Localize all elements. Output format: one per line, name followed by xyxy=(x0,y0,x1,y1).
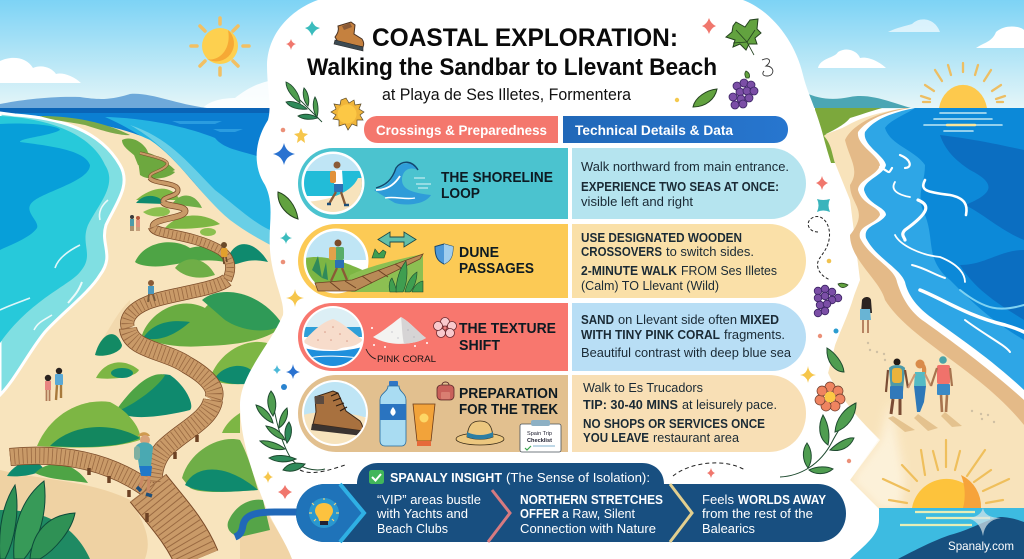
insight column 1: “VIP” areas bustle xyxy=(377,493,481,507)
dune vegetation xyxy=(7,116,283,537)
icon: shield xyxy=(435,244,453,264)
icon: grapes right xyxy=(814,283,848,317)
pink coral callout xyxy=(366,349,436,365)
row 4: preparation for the trek xyxy=(298,375,806,452)
row 4 details: Walk to Es Trucadors xyxy=(583,381,703,395)
row 4 details: NO SHOPS OR SERVICES ONCE xyxy=(583,417,765,431)
row 3 details xyxy=(572,303,806,371)
single walker xyxy=(860,297,872,333)
insight column 2: NORTHERN STRETCHES xyxy=(520,493,663,507)
right sun xyxy=(921,63,1005,108)
tropical plant bottom-left xyxy=(0,481,90,559)
bottom sun xyxy=(883,440,1009,508)
logo text: Spanaly.com xyxy=(948,539,1014,553)
sand footprints xyxy=(867,342,995,423)
hills xyxy=(804,92,911,108)
right beach sand xyxy=(824,108,1024,510)
icon: sand pile xyxy=(371,317,428,348)
left panel yellow xyxy=(298,224,568,298)
icon: hiking boot xyxy=(334,22,364,51)
row 3 details: SAND xyxy=(581,313,614,327)
right sea xyxy=(858,108,1024,400)
left mountains xyxy=(0,94,207,108)
insight column 1 xyxy=(376,493,481,536)
icon: leaf left xyxy=(278,192,298,219)
row 2 details: FROM Ses Illetes xyxy=(681,264,777,278)
pink coral callout: PINK CORAL xyxy=(377,354,436,365)
header: technical details and data: Technical Details & Data xyxy=(575,123,733,138)
logo sparkle xyxy=(966,508,1001,536)
row 3 details: Beautiful contrast with deep blue sea xyxy=(581,346,791,360)
icon: cherry blossom xyxy=(434,318,456,338)
lightbulb badge xyxy=(296,484,364,542)
banner background xyxy=(296,463,846,542)
row 4 details: restaurant area xyxy=(653,431,739,445)
sandbar xyxy=(0,115,300,559)
row 2 title xyxy=(459,244,534,277)
row 3 title xyxy=(459,320,556,354)
icon: backpack xyxy=(437,382,454,400)
icon: double arrow xyxy=(378,232,416,247)
row 3: the texture shift xyxy=(298,303,806,372)
row 3 details: fragments. xyxy=(724,328,785,342)
circle scene boot xyxy=(302,380,368,446)
left panel teal xyxy=(298,148,568,219)
row 3 details: on Llevant side often xyxy=(618,313,737,327)
icon: top-left branch xyxy=(286,82,322,122)
row 4 details: YOU LEAVE xyxy=(583,431,649,445)
row 1 title xyxy=(441,169,553,202)
row 4 title: FOR THE TREK xyxy=(459,401,558,418)
walkers on the beach xyxy=(45,215,227,496)
boardwalk illustration xyxy=(315,249,423,292)
row 2 details xyxy=(572,224,806,298)
subtitle: at Playa de Ses Illetes, Formentera xyxy=(382,86,632,104)
right clouds xyxy=(818,19,1024,68)
white central panel xyxy=(240,0,880,559)
row 2 details: (Calm) TO Llevant (Wild) xyxy=(581,279,719,293)
icon: checklist xyxy=(520,420,561,452)
row 2 details: to switch sides. xyxy=(666,245,754,259)
insight column 1: Beach Clubs xyxy=(377,522,448,536)
row 2 details: USE DESIGNATED WOODEN xyxy=(581,231,742,245)
icon: sun hat xyxy=(456,421,504,445)
row 2 details: 2-MINUTE WALK xyxy=(581,264,677,278)
icon: small sun xyxy=(331,98,364,130)
icon: lower left branch xyxy=(256,391,325,471)
circle scene sand xyxy=(302,306,364,368)
icon: flower xyxy=(815,382,845,411)
header: technical details and data xyxy=(563,116,788,143)
row 2 title: PASSAGES xyxy=(459,260,534,277)
left clouds xyxy=(0,58,275,108)
lagoon xyxy=(0,113,124,395)
title line 1: COASTAL EXPLORATION: xyxy=(372,24,678,52)
decorative sparkles xyxy=(263,18,851,499)
insight column 2 xyxy=(520,493,663,536)
wet sand band xyxy=(845,108,1024,425)
left panel tan xyxy=(298,375,568,452)
insight banner xyxy=(296,463,846,542)
dark sand patches xyxy=(0,300,295,559)
insight column 2: Connection with Nature xyxy=(520,522,656,536)
bottom right sea and logo xyxy=(850,440,1024,559)
icon: lower right branch xyxy=(780,403,856,477)
chevrons xyxy=(488,484,692,542)
icon: wave xyxy=(374,162,431,204)
insight column 3: Feels xyxy=(702,493,734,507)
row 4 title: PREPARATION xyxy=(459,385,558,402)
header: crossings and preparedness xyxy=(364,116,558,143)
icon: grapes xyxy=(729,71,758,109)
row 2: dune passages xyxy=(298,224,806,298)
group of three walkers xyxy=(886,356,962,432)
table column headers xyxy=(364,116,788,143)
row 1 title: THE SHORELINE xyxy=(441,169,553,186)
right-hand sea xyxy=(0,108,300,298)
insight column 2: OFFER xyxy=(520,507,559,521)
icon: vine leaf xyxy=(726,19,761,55)
icon: leaf right xyxy=(827,348,844,372)
insight column 3: WORLDS AWAY xyxy=(738,493,827,507)
row 1 details: Walk northward from main entrance. xyxy=(581,160,789,174)
background: sky xyxy=(0,0,1024,109)
row 1 details: EXPERIENCE TWO SEAS AT ONCE: xyxy=(581,180,779,194)
row 3 title: THE TEXTURE xyxy=(459,320,556,337)
insight column 2: a Raw, Silent xyxy=(562,507,636,521)
insight column 1: with Yachts and xyxy=(376,507,468,521)
row 4 details xyxy=(572,375,806,452)
row 2 title: DUNE xyxy=(459,244,499,261)
left panel coral xyxy=(298,303,568,371)
icon: checklist: Checklist xyxy=(527,438,552,444)
title block xyxy=(307,24,717,104)
row 2 details: CROSSOVERS xyxy=(581,245,662,259)
heading: SPANALY INSIGHT xyxy=(390,470,502,485)
left sun xyxy=(191,18,249,75)
header: crossings and preparedness: Crossings & Preparedness xyxy=(376,123,547,138)
row 3 title: SHIFT xyxy=(459,337,500,354)
circle scene walker on beach xyxy=(300,150,366,216)
left coastal scene xyxy=(0,18,300,559)
insight column 3 xyxy=(702,493,827,536)
heading xyxy=(369,470,650,485)
insight column 3: from the rest of the xyxy=(702,507,813,521)
connector line to insight xyxy=(235,512,300,537)
insight column 3: Balearics xyxy=(702,522,755,536)
icon: yellow dot xyxy=(675,98,679,102)
row 4 details: at leisurely pace. xyxy=(682,398,777,412)
boardwalk xyxy=(10,153,230,559)
row 1 title: LOOP xyxy=(441,185,480,202)
icon: curl xyxy=(762,59,773,76)
icon: checklist: Spain Trip xyxy=(527,431,552,437)
right coastal scene xyxy=(804,19,1024,510)
icon: green leaf top right xyxy=(693,89,717,107)
circle scene boardwalk xyxy=(304,228,368,295)
row 3 details: WITH TINY PINK CORAL xyxy=(581,328,720,342)
row 1 details: visible left and right xyxy=(581,195,694,209)
row 1: the shoreline loop xyxy=(298,148,806,219)
row 3 details: MIXED xyxy=(740,313,779,327)
row 4 title xyxy=(459,385,558,418)
row 1 details xyxy=(572,148,806,219)
row 4 details: TIP: 30-40 MINS xyxy=(583,398,678,412)
title line 2: Walking the Sandbar to Llevant Beach xyxy=(307,54,717,81)
heading: (The Sense of Isolation): xyxy=(506,470,650,485)
soft sand fade xyxy=(850,400,905,510)
icon: sunscreen xyxy=(413,404,435,446)
icon: water bottle xyxy=(380,381,406,446)
